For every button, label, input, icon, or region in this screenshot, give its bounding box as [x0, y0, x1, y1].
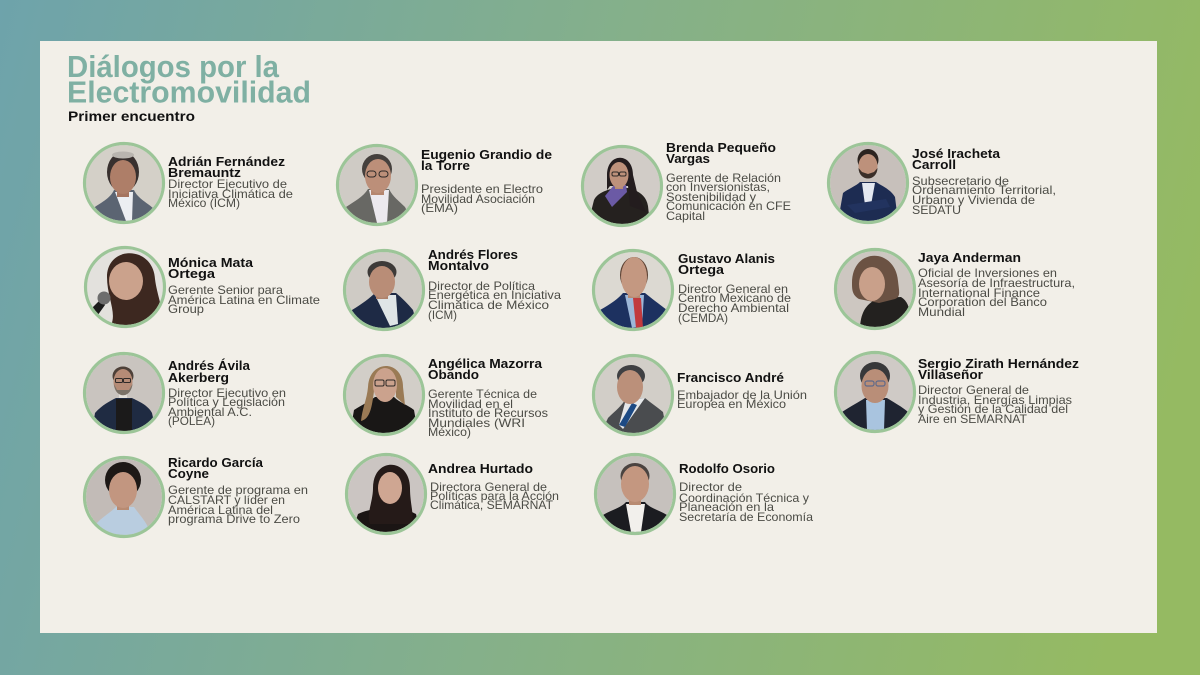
text: Andrés Ávila: (POLEA) [168, 415, 215, 428]
text: Andrea Hurtado: Directora General de [430, 481, 547, 494]
text: Sergio Zirath: Aire en SEMARNAT [918, 413, 1027, 426]
text: Francisco André: Francisco André [677, 370, 784, 385]
icon: portrait Rodolfo Osorio [596, 454, 674, 534]
text: Andrea Hurtado: Climática, SEMARNAT [430, 499, 553, 512]
text: Gustavo Alanis: Derecho Ambiental [678, 302, 789, 315]
text: Eugenio Grandio: Eugenio Grandio de [421, 147, 552, 162]
text: Jaya Anderman: Jaya Anderman [918, 250, 1021, 265]
subtitle: Primer encuentro [68, 109, 195, 124]
text: Jaya Anderman: Mundial [918, 306, 965, 319]
text: Brenda Pequeño: Sostenibilidad y [666, 191, 756, 204]
text: Jaya Anderman: Corporation del Banco [918, 296, 1047, 309]
text: Angélica Mazorra: Obando [428, 367, 479, 382]
text: Rodolfo Osorio: Rodolfo Osorio [679, 461, 775, 476]
text: Andrés Ávila: Andrés Ávila [168, 358, 251, 373]
text: Jaya Anderman [918, 250, 1075, 319]
text: Francisco André: Europea en México [677, 398, 786, 411]
text: Angélica Mazorra: Mundiales (WRI [428, 417, 525, 430]
text: Mónica Mata: Gerente Senior para [168, 284, 284, 297]
text: Angélica Mazorra: México) [428, 426, 471, 439]
icon: portrait Jaya Anderman [836, 250, 914, 328]
text: Eugenio Grandio [421, 147, 552, 215]
text: Francisco André [677, 370, 807, 411]
text: Sergio Zirath: Industria, Energías Limpias [918, 394, 1072, 407]
text: Andrés Flores: (ICM) [428, 309, 457, 322]
text: José Iracheta [912, 146, 1056, 217]
text: José Iracheta: Ordenamiento Territorial, [912, 184, 1056, 197]
text: Jaya Anderman: Asesoría de Infraestructura, [918, 277, 1075, 290]
text: Gustavo Alanis [678, 251, 791, 325]
text: Eugenio Grandio: Presidente en Electro [421, 183, 543, 196]
text: José Iracheta: Subsecretario de [912, 175, 1009, 188]
text: Angélica Mazorra: Angélica Mazorra [428, 356, 543, 371]
text: Sergio Zirath: y Gestión de la Calidad del [918, 403, 1068, 416]
text: Andrea Hurtado: Políticas para la Acción [430, 490, 559, 503]
text: Sergio Zirath: Villaseñor [918, 367, 983, 382]
text: Brenda Pequeño: con Inversionistas, [666, 181, 770, 194]
text: Sergio Zirath: Sergio Zirath Hernández [918, 356, 1080, 371]
text: Eugenio Grandio: Movilidad Asociación [421, 193, 535, 206]
icon: portrait Ricardo García [84, 458, 164, 536]
text: Ricardo García [168, 455, 308, 526]
icon: portrait José Iracheta [828, 144, 908, 222]
text: Angélica Mazorra: Movilidad en el [428, 398, 513, 411]
text: Rodolfo Osorio: Planeación en la [679, 501, 775, 514]
icon: portrait Mónica Mata [86, 248, 164, 326]
text: Rodolfo Osorio: Secretaría de Economía [679, 511, 814, 524]
text: Adrián Fernández: Bremauntz [168, 165, 242, 180]
text: Angélica Mazorra [428, 356, 548, 439]
text: Andrés Flores: Climática de México [428, 299, 549, 312]
text: Andrés Flores: Andrés Flores [428, 247, 518, 262]
text: Ricardo García: CALSTART y líder en [168, 494, 285, 507]
title: Diálogos por la [67, 49, 280, 84]
text: Brenda Pequeño: Comunicación en CFE [666, 200, 791, 213]
text: Jaya Anderman: Oficial de Inversiones en [918, 267, 1057, 280]
text: José Iracheta: Urbano y Vivienda de [912, 194, 1035, 207]
text: Gustavo Alanis: Ortega [678, 262, 725, 277]
icon: portrait Andrea Hurtado [346, 454, 426, 534]
title [67, 49, 311, 110]
text: Francisco André: Embajador de la Unión [677, 389, 807, 402]
text: José Iracheta: Carroll [912, 157, 956, 172]
text: Andrés Ávila: Akerberg [168, 370, 229, 385]
icon: portrait Sergio Zirath [836, 352, 914, 432]
text: Adrián Fernández: Iniciativa Climática de [168, 188, 293, 201]
text: Rodolfo Osorio [679, 461, 814, 524]
text: Brenda Pequeño: Vargas [666, 151, 710, 166]
text: Sergio Zirath [918, 356, 1080, 426]
icon: portrait Angélica Mazorra [344, 356, 424, 434]
icon: portrait Brenda Pequeño [582, 146, 662, 226]
icon: portrait Adrián Fernández [84, 144, 164, 222]
title: Electromovilidad [67, 74, 311, 110]
text: Andrés Flores: Energética en Iniciativa [428, 289, 562, 302]
icon: portrait Andrés Ávila [84, 354, 164, 432]
text: Andrés Ávila: Política y Legislación [168, 396, 285, 409]
text: Andrés Ávila: Director Ejecutivo en [168, 387, 286, 400]
text: Brenda Pequeño [666, 140, 791, 223]
text: Ricardo García: América Latina del [168, 504, 273, 517]
text: Adrián Fernández: Director Ejecutivo de [168, 178, 287, 191]
text: Adrián Fernández: México (ICM) [168, 197, 240, 210]
text: Andrés Ávila [168, 358, 286, 428]
text: Mónica Mata: América Latina en Climate [168, 294, 320, 307]
text: Eugenio Grandio: la Torre [421, 158, 470, 173]
icon: portrait Francisco André [594, 356, 672, 434]
text: Gustavo Alanis: Director General en [678, 283, 788, 296]
text: Andrés Flores [428, 247, 562, 322]
text: Adrián Fernández [168, 154, 293, 210]
text: Sergio Zirath: Director General de [918, 384, 1029, 397]
text: José Iracheta: SEDATU [912, 204, 961, 217]
icon: portrait Gustavo Alanis [594, 250, 672, 330]
text: Andrea Hurtado [428, 461, 559, 512]
icon: portrait Andrés Flores [344, 250, 424, 330]
text: José Iracheta: José Iracheta [912, 146, 1001, 161]
text: Gustavo Alanis: Centro Mexicano de [678, 292, 791, 305]
text: Brenda Pequeño: Capital [666, 210, 705, 223]
text: Andrés Flores: Director de Política [428, 280, 536, 293]
text: Ricardo García: Coyne [168, 466, 209, 481]
text: Angélica Mazorra: Gerente Técnica de [428, 388, 537, 401]
text: Eugenio Grandio: (EMA) [421, 202, 458, 215]
text: Andrés Flores: Montalvo [428, 258, 489, 273]
icon: portrait Eugenio Grandio [338, 146, 416, 224]
text: Mónica Mata: Ortega [168, 266, 216, 281]
text: Rodolfo Osorio: Coordinación Técnica y [679, 492, 809, 505]
text: Ricardo García: Gerente de programa en [168, 484, 308, 497]
text: Andrés Ávila: Ambiental A.C. [168, 406, 252, 419]
text: Ricardo García: programa Drive to Zero [168, 513, 300, 526]
text: Mónica Mata: Mónica Mata [168, 255, 254, 270]
text: Brenda Pequeño: Gerente de Relación [666, 172, 781, 185]
text: Jaya Anderman: International Finance [918, 287, 1040, 300]
text: Brenda Pequeño: Brenda Pequeño [666, 140, 776, 155]
text: Ricardo García: Ricardo García [168, 455, 264, 470]
text: Mónica Mata [168, 255, 320, 316]
text: Andrea Hurtado: Andrea Hurtado [428, 461, 533, 476]
text: Rodolfo Osorio: Director de [679, 481, 742, 494]
text: Gustavo Alanis: (CEMDA) [678, 312, 728, 325]
text: Mónica Mata: Group [168, 303, 204, 316]
text: Adrián Fernández: Adrián Fernández [168, 154, 286, 169]
text: Angélica Mazorra: Instituto de Recursos [428, 407, 548, 420]
text: Gustavo Alanis: Gustavo Alanis [678, 251, 775, 266]
